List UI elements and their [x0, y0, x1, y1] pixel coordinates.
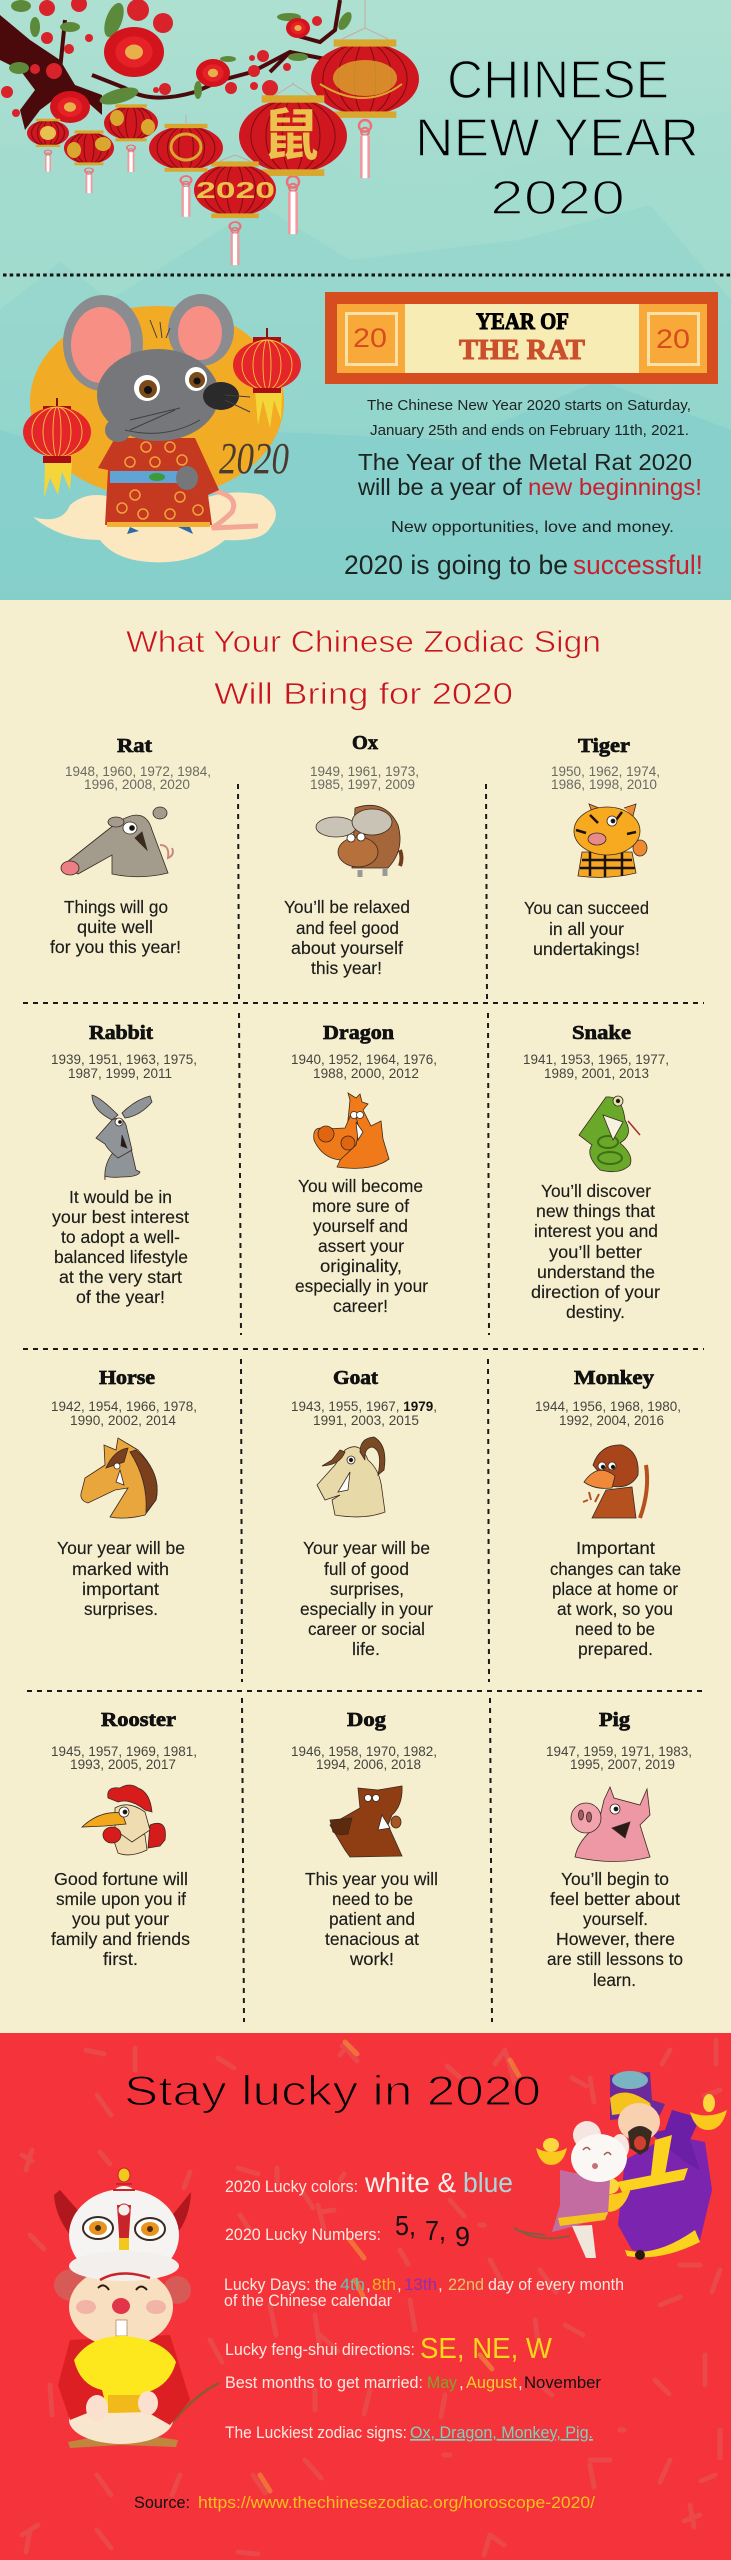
cell: pig: learn. — [593, 1970, 636, 1990]
text block: lucky days: 8th — [372, 2275, 396, 2294]
cell: dog: 1994, 2006, 2018 — [316, 1757, 421, 1772]
cell: rooster: 1945, 1957, 1969, 1981, — [51, 1744, 197, 1759]
text block: lucky days: of the Chinese calendar — [224, 2291, 392, 2310]
illustration: rat with lanterns — [23, 294, 301, 562]
icon: rabbit — [92, 1095, 152, 1180]
cell: rabbit — [51, 1022, 197, 1307]
cell: goat: Your year will be — [303, 1538, 430, 1558]
text block: lucky numbers — [225, 2210, 470, 2252]
title: NEW YEAR — [415, 108, 699, 168]
heading: zodiac: What Your Chinese Zodiac Sign — [126, 624, 601, 659]
illustration: rat in lion dance hat — [54, 2168, 219, 2448]
icon: white rat — [552, 2170, 610, 2232]
cell: pig: 1995, 2007, 2019 — [570, 1757, 675, 1772]
cell: rooster: smile upon you if — [56, 1889, 186, 1909]
cell: dragon: originality, — [320, 1256, 402, 1276]
cell: ox: about yourself — [291, 938, 403, 958]
cell: horse — [51, 1367, 197, 1619]
cell: rat: for you this year! — [50, 937, 181, 957]
icon: right lantern — [233, 328, 301, 428]
cell: monkey: 1992, 2004, 2016 — [559, 1413, 664, 1428]
title: 2020 — [490, 172, 625, 225]
icon: gold ingot — [74, 2336, 176, 2413]
text block: lucky numbers: 7, — [425, 2215, 446, 2246]
icon: goat — [317, 1437, 385, 1517]
cell: goat — [291, 1367, 437, 1659]
icon: tiger — [574, 804, 647, 877]
text block: intro: January 25th and ends on February 11th, 2021. — [370, 422, 689, 439]
cell: monkey: prepared. — [578, 1639, 653, 1659]
text block: lucky days — [224, 2275, 624, 2310]
text block: best months: , — [518, 2373, 523, 2392]
cell: dog: Dog — [347, 1709, 386, 1731]
heading: zodiac — [126, 624, 601, 711]
panel: zodiac signs — [0, 600, 731, 2033]
cell: dragon — [291, 1022, 437, 1316]
cell: rabbit: 1939, 1951, 1963, 1975, — [51, 1052, 197, 1067]
cell: dragon: especially in your — [295, 1276, 428, 1296]
cell: snake — [523, 1022, 669, 1322]
cell: rabbit: to adopt a well- — [61, 1227, 180, 1247]
cell: pig: feel better about — [550, 1889, 680, 1909]
text block: lucky colors: blue — [463, 2167, 513, 2198]
banner: year of the rat — [325, 292, 718, 384]
cell: rabbit: 1987, 1999, 2011 — [68, 1066, 172, 1081]
cell: rabbit: at the very start — [59, 1267, 182, 1287]
cell: pig: You’ll begin to — [561, 1869, 669, 1889]
text: 2020 script: 2020 — [219, 434, 289, 483]
text block: lucky days: 4th — [340, 2275, 365, 2294]
cell: pig: are still lessons to — [547, 1949, 683, 1969]
cell: rabbit: your best interest — [52, 1207, 189, 1227]
cell: dragon: 1940, 1952, 1964, 1976, — [291, 1052, 437, 1067]
text block: intro: successful! — [573, 550, 703, 580]
source line: Source: — [134, 2493, 190, 2512]
icon: snake — [579, 1096, 640, 1172]
icon: cloud — [33, 492, 276, 562]
cell: rat — [50, 735, 211, 957]
icon: dragon — [314, 1093, 389, 1168]
text block: best months: , — [459, 2373, 464, 2392]
cell: rabbit: Rabbit — [89, 1022, 153, 1044]
cell: monkey: need to be — [575, 1619, 655, 1639]
text block: lucky days: , — [366, 2275, 371, 2294]
icon: gold ingots — [536, 2110, 727, 2212]
icon: tail — [210, 490, 258, 528]
icon: robe — [98, 438, 219, 525]
cell: rooster: you put your — [72, 1909, 169, 1929]
cell: ox: this year! — [311, 958, 382, 978]
text block: lucky numbers: 2020 Lucky Numbers: — [225, 2225, 381, 2244]
cell: dog: This year you will — [305, 1869, 438, 1889]
icon: pig — [571, 1787, 650, 1862]
cell: tiger: You can succeed — [524, 898, 649, 918]
icon: monkey — [583, 1445, 647, 1518]
text block: lucky numbers: 5, — [395, 2210, 416, 2241]
text block: luckiest signs — [225, 2423, 593, 2442]
cell: tiger: undertakings! — [533, 939, 640, 959]
illustration: hanging lanterns: 2020 — [196, 177, 275, 203]
cell: rooster: family and friends — [51, 1929, 190, 1949]
cell: tiger: Tiger — [578, 735, 630, 757]
cell: monkey: at work, so you — [557, 1599, 673, 1619]
cell: dog: work! — [349, 1949, 394, 1969]
panel: teal header and rat intro background — [0, 0, 731, 600]
cell: horse: marked with — [72, 1559, 169, 1579]
icon: dog — [330, 1786, 402, 1857]
icon: face — [618, 2103, 660, 2141]
cell: horse: important — [82, 1579, 159, 1599]
illustration: plum blossom branch — [0, 0, 354, 130]
cell: pig: 1947, 1959, 1971, 1983, — [546, 1744, 692, 1759]
text block: luckiest signs: The Luckiest zodiac signs: — [225, 2423, 407, 2442]
icon: rat tail — [170, 2383, 219, 2425]
cell: dragon: You will become — [298, 1176, 423, 1196]
cell: rabbit: of the year! — [76, 1287, 165, 1307]
cell: horse: Your year will be — [57, 1538, 185, 1558]
cell: dog: tenacious at — [325, 1929, 419, 1949]
cell: rat: 1948, 1960, 1972, 1984, — [65, 764, 211, 779]
cell: horse: Horse — [99, 1367, 155, 1389]
title — [415, 50, 699, 225]
cell: snake: understand the — [537, 1262, 655, 1282]
icon: tail — [515, 2228, 570, 2238]
cell: pig: Pig — [599, 1709, 630, 1731]
text block: lucky numbers: 9 — [455, 2221, 470, 2252]
source line: https://www.thechinesezodiac.org/horoscope-2020/ — [198, 2493, 595, 2512]
cell: snake: interest you and — [534, 1221, 658, 1241]
cell: snake: Snake — [572, 1022, 631, 1044]
cell: snake: direction of your — [531, 1282, 660, 1302]
icon: purple robe — [618, 2135, 712, 2253]
text block: feng-shui directions — [225, 2333, 553, 2365]
cell: goat: surprises, — [330, 1579, 404, 1599]
text block: intro: New opportunities, love and money. — [391, 519, 674, 536]
cell: rooster: Good fortune will — [54, 1869, 188, 1889]
cell: rabbit: balanced lifestyle — [54, 1247, 188, 1267]
cell: snake: destiny. — [566, 1302, 625, 1322]
cell: rat: Rat — [117, 735, 152, 757]
icon: rat face — [69, 2267, 173, 2347]
cell: snake: 1989, 2001, 2013 — [544, 1066, 649, 1081]
cell: dragon: 1988, 2000, 2012 — [313, 1066, 419, 1081]
cell: dragon: career! — [333, 1296, 388, 1316]
icon: left lantern — [23, 398, 91, 498]
illustration: hanging lanterns — [27, 0, 419, 265]
cell: goat: especially in your — [300, 1599, 433, 1619]
text block: best months: August — [466, 2373, 517, 2392]
banner: year of the rat: THE RAT — [459, 335, 585, 366]
icon: rooster — [82, 1785, 165, 1855]
panel: stay lucky background — [0, 2033, 731, 2560]
cell: goat: 1991, 2003, 2015 — [313, 1413, 419, 1428]
cell: dog: 1946, 1958, 1970, 1982, — [291, 1744, 437, 1759]
text block: lucky colors: 2020 Lucky colors: — [225, 2177, 358, 2196]
cell: rooster: first. — [103, 1949, 138, 1969]
title: CHINESE — [447, 50, 669, 110]
text block: intro: will be a year of — [357, 474, 523, 500]
cell: horse: 1942, 1954, 1966, 1978, — [51, 1399, 197, 1414]
cell: monkey: changes can take — [550, 1559, 681, 1579]
cell: monkey: 1944, 1956, 1968, 1980, — [535, 1399, 681, 1414]
cell: rat: 1996, 2008, 2020 — [84, 777, 190, 792]
text block: best months: November — [524, 2373, 601, 2392]
text block: feng-shui directions: Lucky feng-shui directions: — [225, 2340, 415, 2359]
icon: horse — [81, 1438, 157, 1518]
cell: pig — [546, 1709, 692, 1990]
text block: intro: The Chinese New Year 2020 starts on Saturday, — [367, 397, 691, 414]
cell: snake: 1941, 1953, 1965, 1977, — [523, 1052, 669, 1067]
cell: ox: and feel good — [296, 918, 399, 938]
icon: red robe — [58, 2335, 190, 2425]
cell: rat: Things will go — [64, 897, 168, 917]
cell: monkey: place at home or — [552, 1579, 678, 1599]
cell: pig: However, there — [556, 1929, 675, 1949]
text block: luckiest signs: Ox, Dragon, Monkey, Pig. — [410, 2423, 593, 2442]
cell: horse: surprises. — [84, 1599, 158, 1619]
cell: dragon: yourself and — [313, 1216, 408, 1236]
text block: lucky days: 22nd — [448, 2275, 484, 2294]
cell: goat: full of good — [324, 1559, 409, 1579]
text block: lucky days: day of every month — [488, 2275, 624, 2294]
cell: dog: need to be — [332, 1889, 413, 1909]
cell: goat: Goat — [333, 1367, 378, 1389]
text block: feng-shui directions: SE, NE, W — [420, 2333, 553, 2365]
cell: ox: 1949, 1961, 1973, — [310, 764, 419, 779]
cell: snake: You’ll discover — [541, 1181, 651, 1201]
cell: goat: 1943, 1955, 1967, 1979, — [291, 1399, 437, 1414]
cell: dragon: Dragon — [323, 1022, 394, 1044]
heading: zodiac: Will Bring for 2020 — [214, 676, 513, 711]
icon: ox — [316, 805, 402, 877]
text block: best months: May — [427, 2373, 457, 2392]
banner: year of the rat: 20 — [656, 324, 690, 354]
illustration: god of wealth with white rat — [515, 2071, 727, 2260]
cell: dragon: more sure of — [312, 1196, 409, 1216]
dotted section divider — [3, 274, 731, 276]
cell: snake: new things that — [536, 1201, 655, 1221]
cell: dog: patient and — [329, 1909, 415, 1929]
cell: ox — [284, 732, 419, 978]
cell: rat: quite well — [77, 917, 153, 937]
heading: stay lucky: Stay lucky in 2020 — [124, 2067, 541, 2114]
text block: lucky colors: white & — [364, 2167, 456, 2198]
cell: dragon: assert your — [318, 1236, 404, 1256]
cell: monkey: Important — [576, 1538, 655, 1558]
text block: intro: 2020 is going to be — [344, 550, 568, 580]
icon: rat head — [97, 349, 219, 441]
icon: hat — [610, 2072, 665, 2120]
banner: year of the rat: YEAR OF — [476, 309, 569, 334]
cell: monkey — [535, 1367, 681, 1659]
cell: goat: life. — [352, 1639, 380, 1659]
cell: tiger: in all your — [549, 919, 624, 939]
cell: tiger: 1950, 1962, 1974, — [551, 764, 660, 779]
cell: ox: Ox — [352, 732, 378, 754]
text block: intro: new beginnings! — [528, 474, 702, 500]
cell: tiger — [524, 735, 660, 959]
text block: intro: The Year of the Metal Rat 2020 — [358, 449, 692, 475]
cell: tiger: 1986, 1998, 2010 — [551, 777, 657, 792]
cell: rabbit: It would be in — [69, 1187, 172, 1207]
cell: rooster — [51, 1709, 197, 1969]
banner: year of the rat: 20 — [353, 323, 387, 353]
illustration: hanging lanterns: 鼠 — [263, 91, 319, 172]
icon: lion head — [54, 2190, 191, 2235]
cell: pig: yourself. — [583, 1909, 648, 1929]
cell: ox: You’ll be relaxed — [284, 897, 410, 917]
cell: monkey: Monkey — [574, 1367, 654, 1389]
cell: rooster: 1993, 2005, 2017 — [70, 1757, 176, 1772]
text block: intro — [344, 397, 703, 580]
cell: ox: 1985, 1997, 2009 — [310, 777, 415, 792]
cell: snake: you’ll better — [549, 1242, 642, 1262]
text block: lucky days: , — [438, 2275, 443, 2294]
text block: lucky colors — [225, 2167, 513, 2198]
cell: rooster: Rooster — [101, 1709, 176, 1731]
cell: horse: 1990, 2002, 2014 — [70, 1413, 176, 1428]
cell: dog — [291, 1709, 438, 1969]
text block: lucky days: Lucky Days: the — [224, 2275, 337, 2294]
text block: best months: Best months to get married: — [225, 2373, 423, 2392]
icon: rat — [61, 807, 173, 877]
text block: lucky days: 13th — [404, 2275, 437, 2294]
cell: goat: career or social — [308, 1619, 425, 1639]
text block: best months — [225, 2373, 601, 2392]
text block: lucky days: , — [397, 2275, 402, 2294]
